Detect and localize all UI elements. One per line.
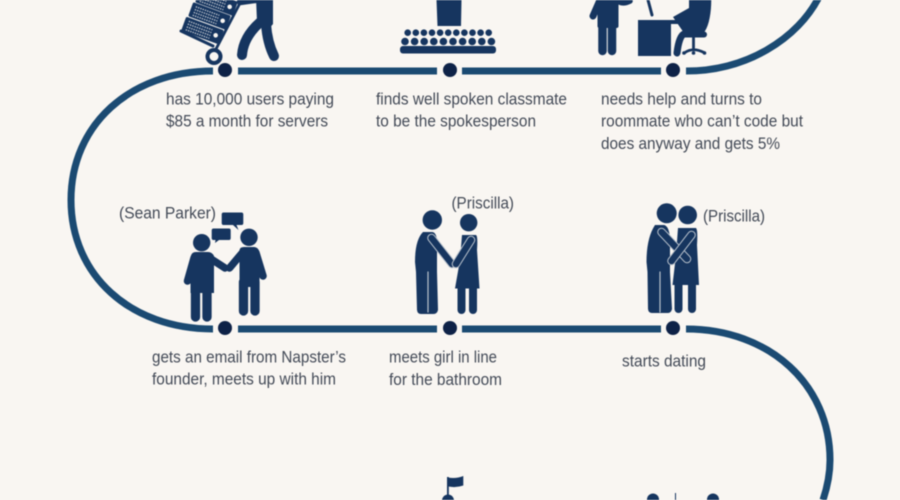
text: finds well spoken classmate (376, 90, 567, 130)
icon: two men shaking hands with speech bubbles (188, 212, 263, 317)
icon: couple embracing (646, 203, 699, 313)
icon: podium and audience (400, 0, 496, 54)
text: needs help: does anyway and gets 5% (601, 134, 780, 153)
text: starts dating: starts dating (622, 352, 706, 370)
label: Priscilla: (Priscilla) (452, 194, 514, 212)
icon: person with flag (442, 476, 463, 500)
icon: two people at bottom (647, 493, 719, 500)
text: gets an email: gets an email from Napster’s (152, 348, 346, 366)
text: gets an email: founder, meets up with him (152, 370, 336, 388)
text: needs help: needs help and turns to (601, 90, 762, 108)
text: meets girl (389, 348, 502, 389)
text: needs help (601, 90, 803, 153)
text: has 10,000 users (166, 90, 334, 130)
text: finds well spoken classmate: to be the spokesperson (376, 112, 536, 130)
icon: couple holding hands (415, 210, 480, 314)
icon: man pushing server cart (181, 0, 274, 63)
label: Sean Parker: (Sean Parker) (119, 204, 216, 222)
icon: man at desk asking roommate for help (593, 0, 709, 56)
text: needs help: roommate who can’t code but (601, 112, 803, 130)
text: has 10,000 users: $85 a month for servers (166, 112, 328, 130)
text: has 10,000 users: has 10,000 users paying (166, 90, 334, 108)
text: meets girl: meets girl in line (389, 348, 497, 366)
text: gets an email (152, 348, 346, 388)
text: finds well spoken classmate: finds well spoken classmate (376, 90, 567, 108)
label: Priscilla 2: (Priscilla) (703, 206, 765, 226)
timeline dots (218, 63, 680, 335)
text: meets girl: for the bathroom (389, 370, 502, 389)
